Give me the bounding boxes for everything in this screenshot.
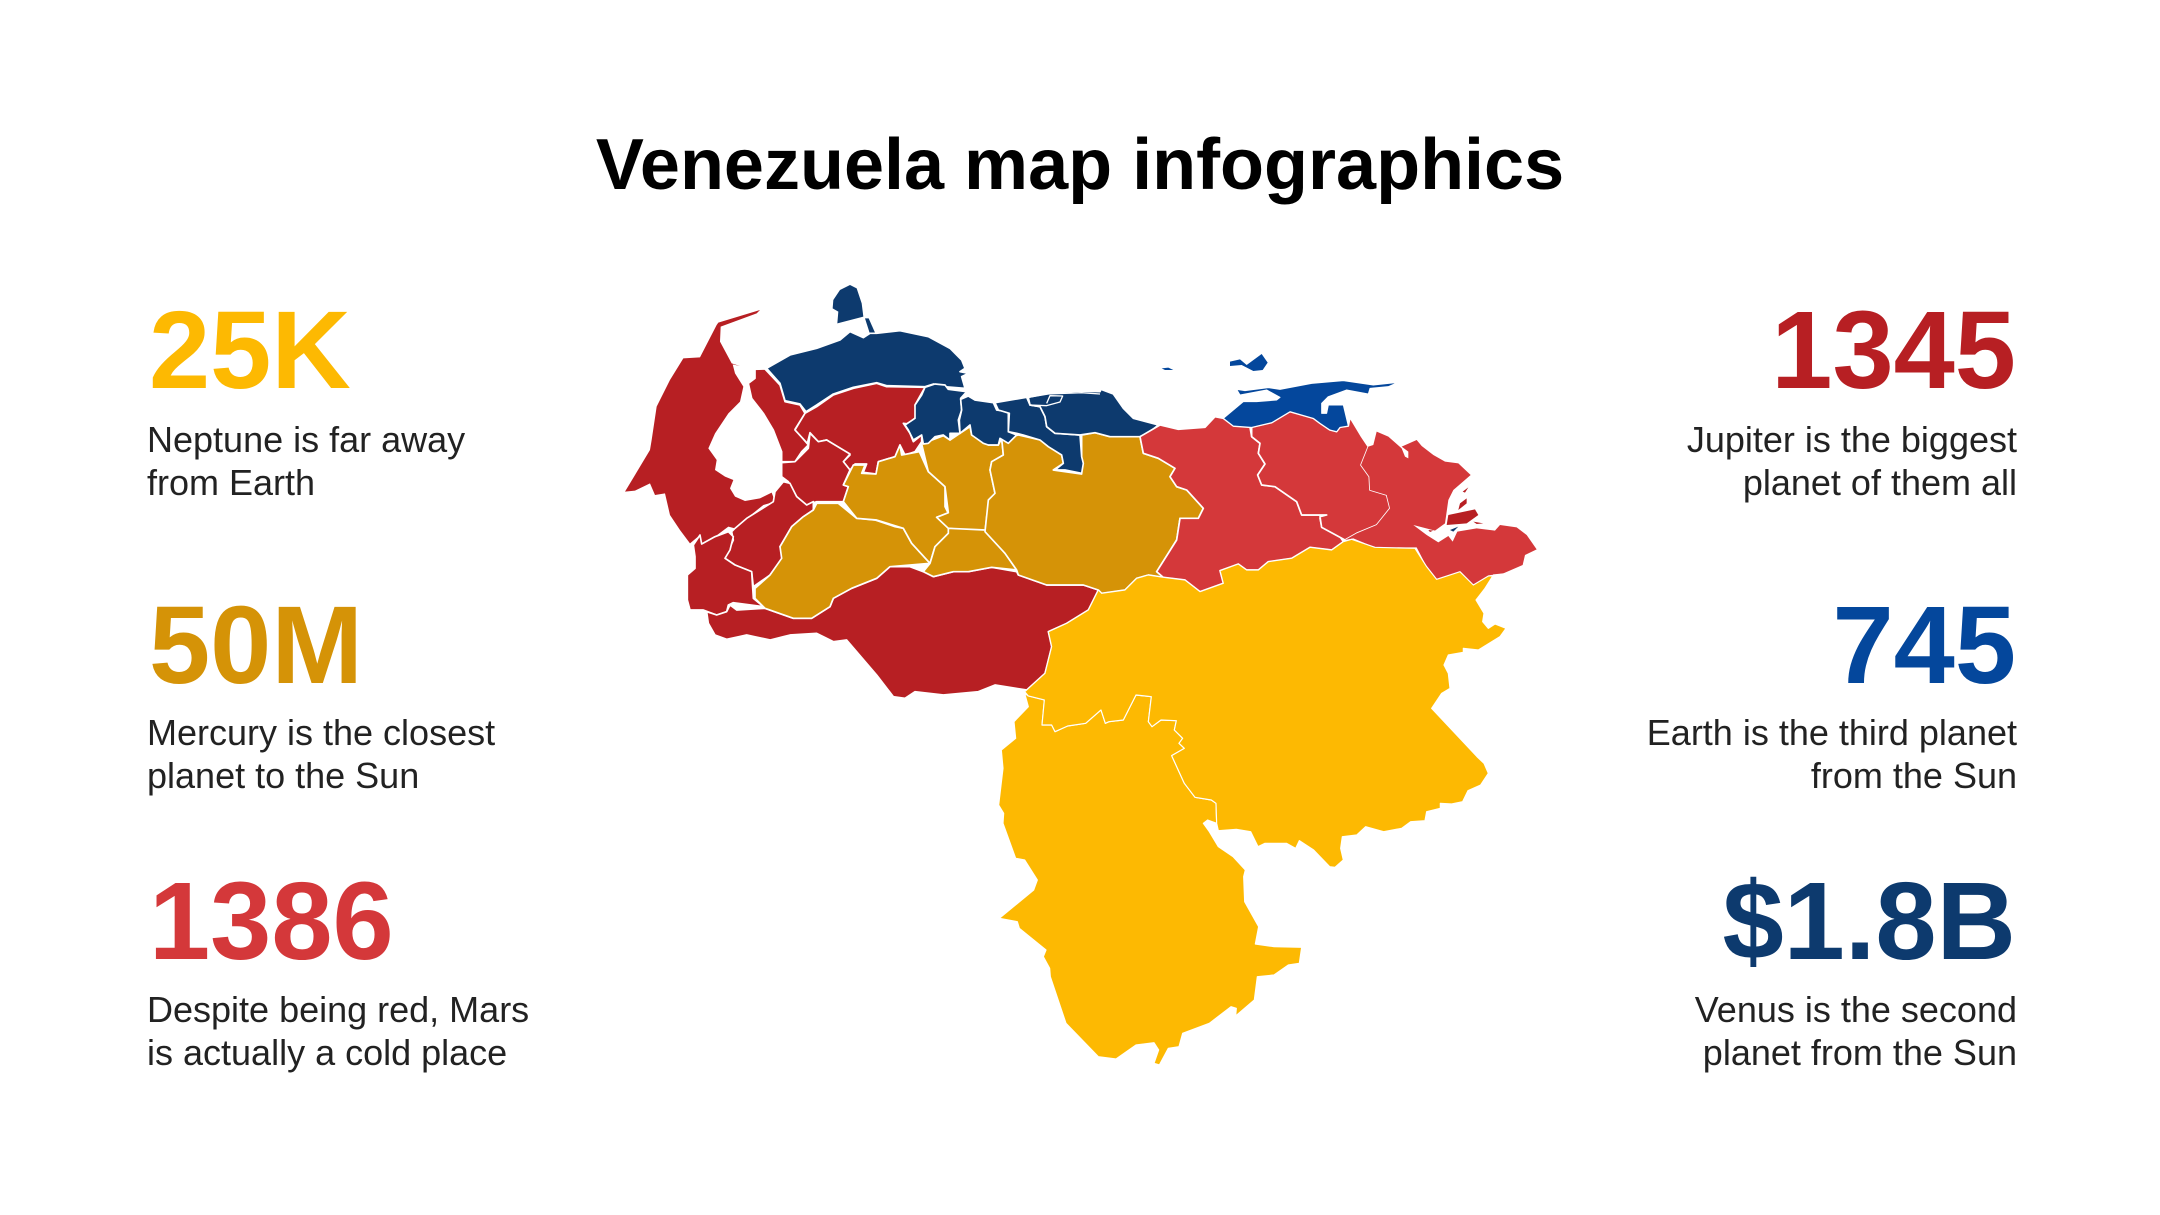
delta islands <box>1428 487 1483 532</box>
stat: 745: 745 <box>1832 584 2016 707</box>
stat: $1.8B <box>1694 860 2017 1073</box>
stat: $1.8B: planet from the Sun <box>1703 1032 2017 1073</box>
stat: 25K <box>147 289 465 503</box>
Bolivar <box>1025 539 1506 867</box>
stat: 25K: 25K <box>149 289 351 412</box>
stat: 745: from the Sun <box>1811 755 2017 796</box>
region group: eastern states <box>1140 354 1537 592</box>
region group: dark red states <box>625 310 1098 698</box>
region group: yellow states <box>999 539 1506 1065</box>
stat: 1345: 1345 <box>1771 289 2016 412</box>
stat: 1386: Despite being red, Mars <box>147 989 529 1030</box>
stat: 1386: is actually a cold place <box>147 1032 507 1073</box>
region group: ochre states <box>755 427 1203 618</box>
region group: navy states <box>767 285 1158 473</box>
stat: $1.8B: $1.8B <box>1722 860 2016 983</box>
Amazonas <box>999 693 1302 1065</box>
stat: 25K: from Earth <box>147 462 315 503</box>
stat: 50M <box>147 584 495 796</box>
stat: 50M: 50M <box>149 584 363 707</box>
stat: 1345: Jupiter is the biggest <box>1687 419 2017 460</box>
stat: 50M: Mercury is the closest <box>147 712 495 753</box>
stat: 1386 <box>147 860 529 1073</box>
region group: blue coast and islands <box>1162 354 1458 532</box>
stat: 1345 <box>1687 289 2017 503</box>
stat: 1345: planet of them all <box>1743 462 2017 503</box>
stat: 25K: Neptune is far away <box>147 419 465 460</box>
stat: $1.8B: Venus is the second <box>1695 989 2017 1030</box>
stat: 50M: planet to the Sun <box>147 755 419 796</box>
map of Venezuela <box>625 285 1537 1065</box>
stat: 745 <box>1647 584 2017 796</box>
stat: 745: Earth is the third planet <box>1647 712 2017 753</box>
title: Venezuela map infographics <box>596 125 1564 205</box>
stat: 1386: 1386 <box>149 860 394 983</box>
